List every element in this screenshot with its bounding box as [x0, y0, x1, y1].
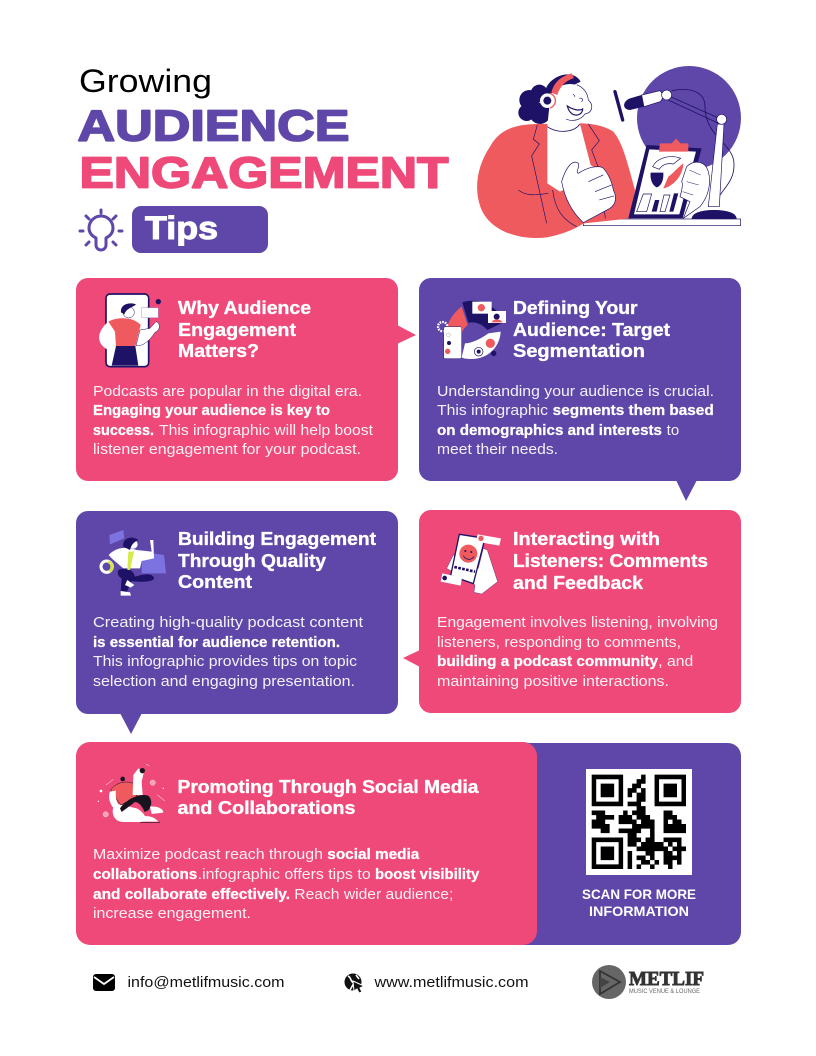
body text: This infographic will help boost [159, 423, 373, 439]
heading: Matters? [178, 340, 259, 361]
footer: email: info@metlifmusic.com [128, 974, 284, 991]
desk [583, 219, 741, 226]
heading: Content [178, 571, 252, 592]
icon: person sitting on beanbag [98, 764, 165, 823]
body text: building a podcast community [437, 654, 658, 670]
body text: social media [327, 847, 420, 863]
body text [93, 615, 363, 690]
heading: Building Engagement [178, 528, 376, 549]
panel: interacting with listeners [403, 510, 741, 713]
QR caption: INFORMATION [589, 903, 689, 919]
body text: success. [93, 423, 154, 439]
body text: listeners, responding to comments, [437, 635, 681, 651]
body text: Reach wider audience; [294, 887, 453, 903]
tips badge: Tips [145, 210, 218, 246]
heading [513, 297, 670, 361]
illustration: podcast host at microphone [477, 66, 741, 238]
title line: Audience: AUDIENCE [78, 102, 350, 150]
body text: , and [658, 654, 693, 670]
body text: This infographic provides tips on topic [93, 654, 357, 670]
heading: Engagement [178, 319, 296, 340]
body text: collaborations [93, 867, 197, 883]
heading: Listeners: Comments [513, 550, 708, 571]
QR caption [582, 886, 696, 919]
heading: and Feedback [513, 572, 644, 593]
body text [437, 615, 718, 690]
face [549, 84, 592, 120]
body text [437, 384, 714, 458]
shirt and neck [547, 124, 600, 192]
headphones [551, 73, 574, 95]
logo: Metlif: METLIF [629, 968, 704, 990]
heading [513, 528, 708, 593]
heading: Interacting with [513, 528, 660, 549]
logo: Metlif [592, 965, 704, 999]
clipboard [628, 145, 702, 218]
jacket lines [518, 124, 605, 227]
body text: segments them based [553, 403, 714, 419]
heading [178, 776, 479, 818]
icon: light bulb [80, 210, 122, 250]
body text: boost visibility [375, 867, 479, 883]
body text: selection and engaging presentation. [93, 674, 355, 690]
body text: listener engagement for your podcast. [93, 442, 361, 458]
heading: Audience: Target [513, 319, 670, 340]
icon: person stepping out of a phone [99, 294, 161, 367]
icon: phone with smiley and reviews [441, 534, 501, 594]
QR caption: SCAN FOR MORE [582, 886, 696, 902]
heading: Segmentation [513, 340, 645, 361]
microphone [615, 92, 623, 120]
title line: Engagement: ENGAGEMENT [80, 150, 449, 198]
icon: woman working with floating screens [101, 530, 166, 596]
logo mark [592, 965, 626, 999]
body text: This infographic [437, 403, 548, 419]
icon: globe with cursor [344, 974, 364, 993]
heading: Through Quality [178, 550, 327, 571]
panel: promoting through social media [76, 742, 537, 945]
body text: to [667, 423, 679, 439]
footer: website: www.metlifmusic.com [373, 974, 528, 991]
panel: QR background [400, 743, 741, 945]
body text [93, 847, 479, 922]
panel: building engagement through quality content [76, 511, 398, 734]
body text [93, 384, 373, 458]
body text: Creating high-quality podcast content [93, 615, 363, 631]
body text: increase engagement. [93, 906, 251, 922]
body text: Podcasts are popular in the digital era. [93, 384, 362, 400]
body text: maintaining positive interactions. [437, 674, 669, 690]
panel: why audience engagement matters [76, 278, 416, 481]
body text: on demographics and interests [437, 423, 662, 439]
title [78, 63, 449, 198]
body text: Engaging your audience is key to [93, 403, 330, 419]
curly hair [518, 74, 581, 124]
heading [178, 297, 311, 361]
heading: Promoting Through Social Media [178, 776, 479, 797]
panel: defining your audience [419, 278, 741, 501]
body text: is essential for audience retention. [93, 635, 340, 651]
icon: envelope [93, 974, 115, 991]
body text: Maximize podcast reach through [93, 847, 323, 863]
heading: Why Audience [178, 297, 311, 318]
footer: website [344, 974, 528, 993]
body text: meet their needs. [437, 442, 558, 458]
heading: Defining Your [513, 297, 638, 318]
heading [178, 528, 376, 592]
mic stand [667, 90, 734, 207]
QR code [586, 769, 692, 875]
body [477, 123, 635, 238]
body text: Understanding your audience is crucial. [437, 384, 714, 400]
hand on chest [562, 162, 616, 223]
heading: and Collaborations [178, 797, 356, 818]
body text: .infographic offers tips to [198, 867, 371, 883]
logo: Metlif: MUSIC VENUE & LOUNGE [629, 988, 701, 995]
body text: Engagement involves listening, involving [437, 615, 718, 631]
title line: Growing: Growing [79, 63, 212, 99]
icon: audience segmentation donut [438, 301, 506, 359]
hand on clipboard [680, 162, 710, 218]
body text: and collaborate effectively. [93, 887, 290, 903]
tips badge [132, 206, 268, 253]
